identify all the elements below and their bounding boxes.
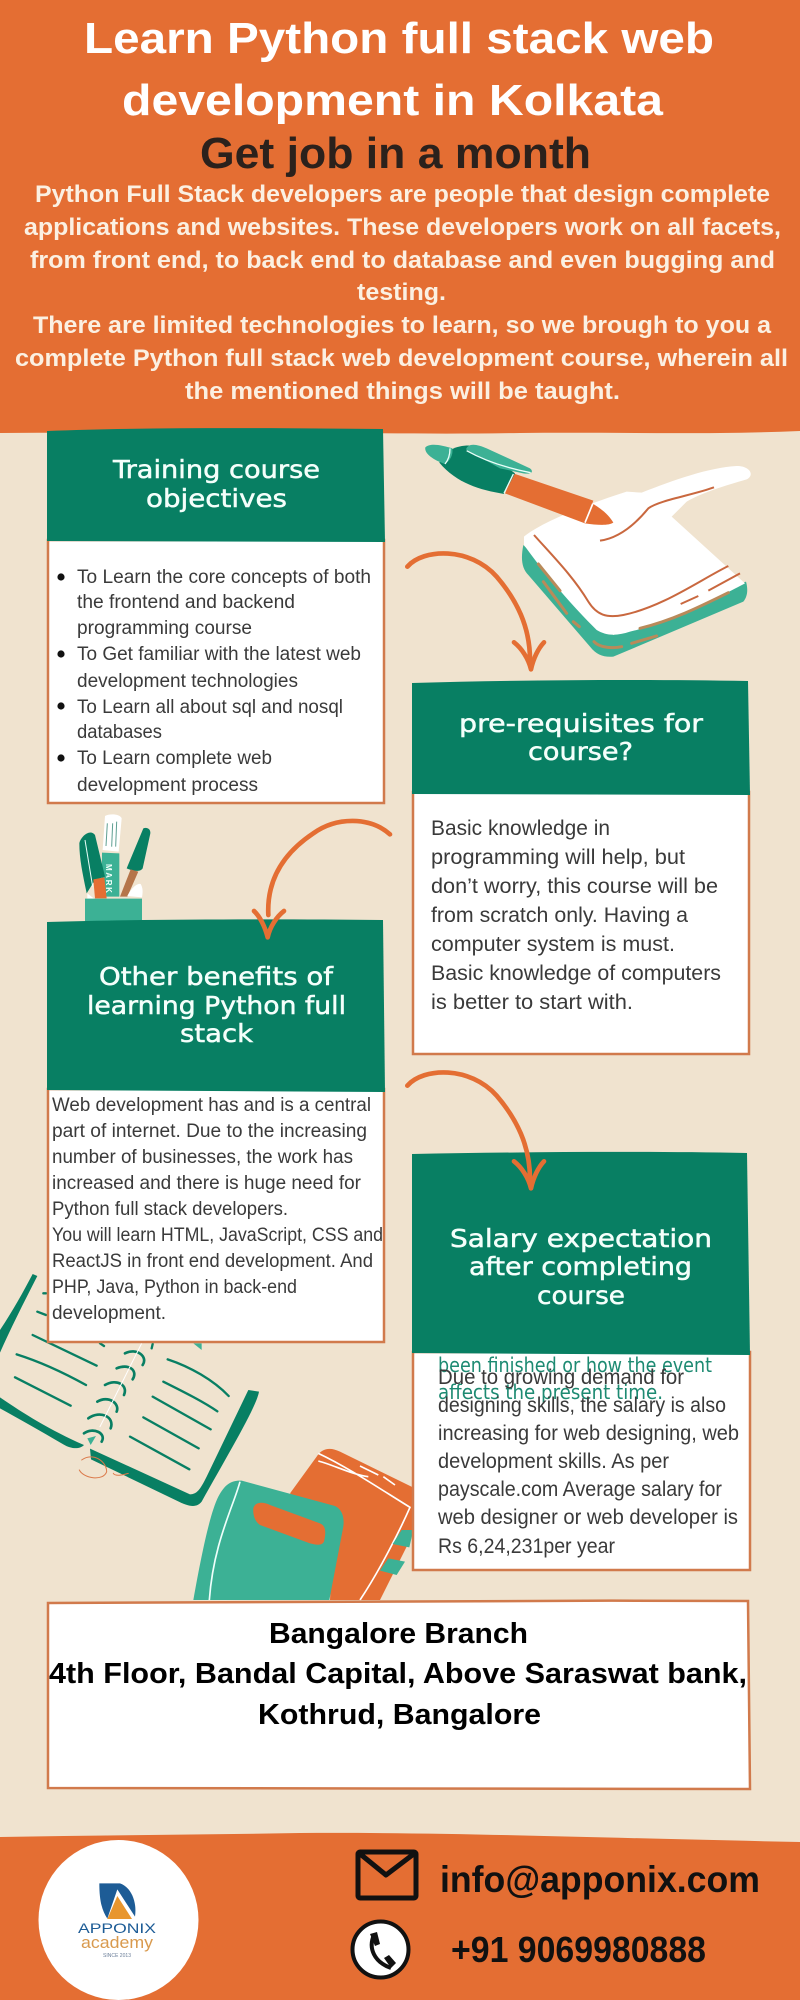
pre-requisites body text: Basic knowledge of computers <box>431 962 721 985</box>
heading: training course objectives: Training course <box>112 455 320 484</box>
pre-requisites body text: don’t worry, this course will be <box>431 875 718 898</box>
objectives bullet list <box>57 567 371 796</box>
phone number: +91 9069980888 <box>451 1929 706 1970</box>
panel: branch address <box>48 1601 750 1789</box>
title: development in Kolkata <box>122 76 664 125</box>
arrow: other benefits to salary <box>407 1072 544 1188</box>
heading: salary expectation: Salary expectation <box>450 1224 712 1253</box>
heading: pre-requisites: course? <box>528 737 633 766</box>
title: Learn Python full stack web <box>84 14 714 63</box>
other benefits body text: You will learn HTML, JavaScript, CSS and <box>52 1225 383 1246</box>
logo academy: academy <box>81 1933 154 1952</box>
icon: email envelope <box>358 1852 416 1898</box>
overlapping green text <box>438 1353 712 1404</box>
other benefits body text: ReactJS in front end development. And <box>52 1251 373 1272</box>
panel: pre-requisites for course <box>412 680 750 1054</box>
heading: other benefits: learning Python full <box>87 991 346 1020</box>
title <box>84 14 714 125</box>
heading: pre-requisites: pre-requisites for <box>459 709 704 738</box>
intro paragraph: testing. <box>357 279 446 306</box>
heading: salary expectation: course <box>537 1281 625 1310</box>
illustration: pen and notebook <box>425 445 751 657</box>
subtitle: Get job in a month <box>200 129 591 178</box>
salary body text: designing skills, the salary is also <box>438 1394 726 1417</box>
arrow: objectives to pre-requisites <box>407 553 544 669</box>
salary body text: Due to growing demand for <box>438 1366 684 1389</box>
pre-requisites body text: is better to start with. <box>431 991 633 1014</box>
pre-requisites body text: computer system is must. <box>431 933 675 956</box>
icon: telephone <box>352 1922 408 1978</box>
logo mark <box>99 1883 135 1919</box>
panel: other benefits <box>47 919 385 1342</box>
salary body text: Rs 6,24,231per year <box>438 1535 615 1558</box>
intro paragraph: from front end, to back end to database and even bugging and <box>30 247 775 274</box>
heading: other benefits: Other benefits of <box>99 962 334 991</box>
arrow: pre-requisites to other benefits <box>254 821 390 937</box>
pre-requisites body text: programming will help, but <box>431 846 685 869</box>
salary body text: development skills. As per <box>438 1450 669 1473</box>
logo since: SINCE 2013 <box>103 1953 131 1959</box>
intro paragraph: the mentioned things will be taught. <box>185 378 620 405</box>
intro paragraph <box>15 181 788 405</box>
email address: info@apponix.com <box>440 1859 760 1900</box>
pre-requisites body text: Basic knowledge in <box>431 817 610 840</box>
salary body text: increasing for web designing, web <box>438 1422 739 1445</box>
intro paragraph: There are limited technologies to learn, so we brough to you a <box>33 312 772 339</box>
illustration: open ring notebook <box>0 1274 259 1506</box>
illustration: stacked books <box>193 1449 415 1600</box>
logo name: APPONIX <box>78 1920 157 1936</box>
panel: salary expectation <box>412 1152 750 1570</box>
illustration: marker cup: MARK <box>104 864 113 895</box>
objectives bullet list: To Learn complete web <box>77 748 272 769</box>
panel: training course objectives <box>47 428 385 803</box>
heading: training course objectives <box>112 455 320 513</box>
salary body text <box>437 1366 739 1558</box>
address text: 4th Floor, Bandal Capital, Above Saraswat bank, <box>49 1658 747 1690</box>
intro paragraph: applications and websites. These developers work on all facets, <box>24 214 781 241</box>
salary body text: payscale.com Average salary for <box>438 1478 722 1501</box>
intro paragraph: complete Python full stack web development course, wherein all <box>15 345 788 372</box>
pre-requisites body text: from scratch only. Having a <box>431 904 688 927</box>
overlapping green text: been finished or how the event <box>438 1353 712 1377</box>
objectives bullet list: programming course <box>77 618 252 639</box>
objectives bullet list: the frontend and backend <box>77 592 295 613</box>
other benefits body text: PHP, Java, Python in back-end <box>52 1277 297 1298</box>
heading: other benefits <box>87 962 346 1048</box>
intro paragraph: Python Full Stack developers are people that design complete <box>35 181 770 208</box>
objectives bullet list: development technologies <box>77 671 298 692</box>
other benefits body text: increased and there is huge need for <box>52 1173 362 1194</box>
other benefits body text: Python full stack developers. <box>52 1199 288 1220</box>
heading: salary expectation: after completing <box>469 1252 692 1281</box>
address text <box>49 1618 747 1731</box>
objectives bullet list: development process <box>77 775 258 796</box>
address text: Kothrud, Bangalore <box>258 1699 541 1731</box>
other benefits body text: Web development has and is a central <box>52 1095 371 1116</box>
footer band <box>0 1833 800 2000</box>
other benefits body text: development. <box>52 1303 166 1324</box>
header band <box>0 0 800 434</box>
logo badge <box>38 1840 198 2000</box>
other benefits body text <box>52 1095 383 1324</box>
objectives bullet list: To Learn all about sql and nosql <box>77 697 343 718</box>
objectives bullet list: To Learn the core concepts of both <box>77 567 371 588</box>
pre-requisites body text <box>431 817 721 1014</box>
illustration: marker cup <box>79 814 150 922</box>
heading: training course objectives: objectives <box>146 484 287 513</box>
overlapping green text: affects the present time. <box>438 1380 663 1404</box>
address text: Bangalore Branch <box>269 1618 528 1650</box>
salary body text: web designer or web developer is <box>437 1506 738 1529</box>
objectives bullet list: To Get familiar with the latest web <box>77 644 361 665</box>
heading: salary expectation <box>450 1224 712 1310</box>
other benefits body text: number of businesses, the work has <box>52 1147 353 1168</box>
heading: pre-requisites <box>459 709 704 766</box>
other benefits body text: part of internet. Due to the increasing <box>52 1121 367 1142</box>
objectives bullet list: databases <box>77 722 162 743</box>
heading: other benefits: stack <box>180 1019 254 1048</box>
